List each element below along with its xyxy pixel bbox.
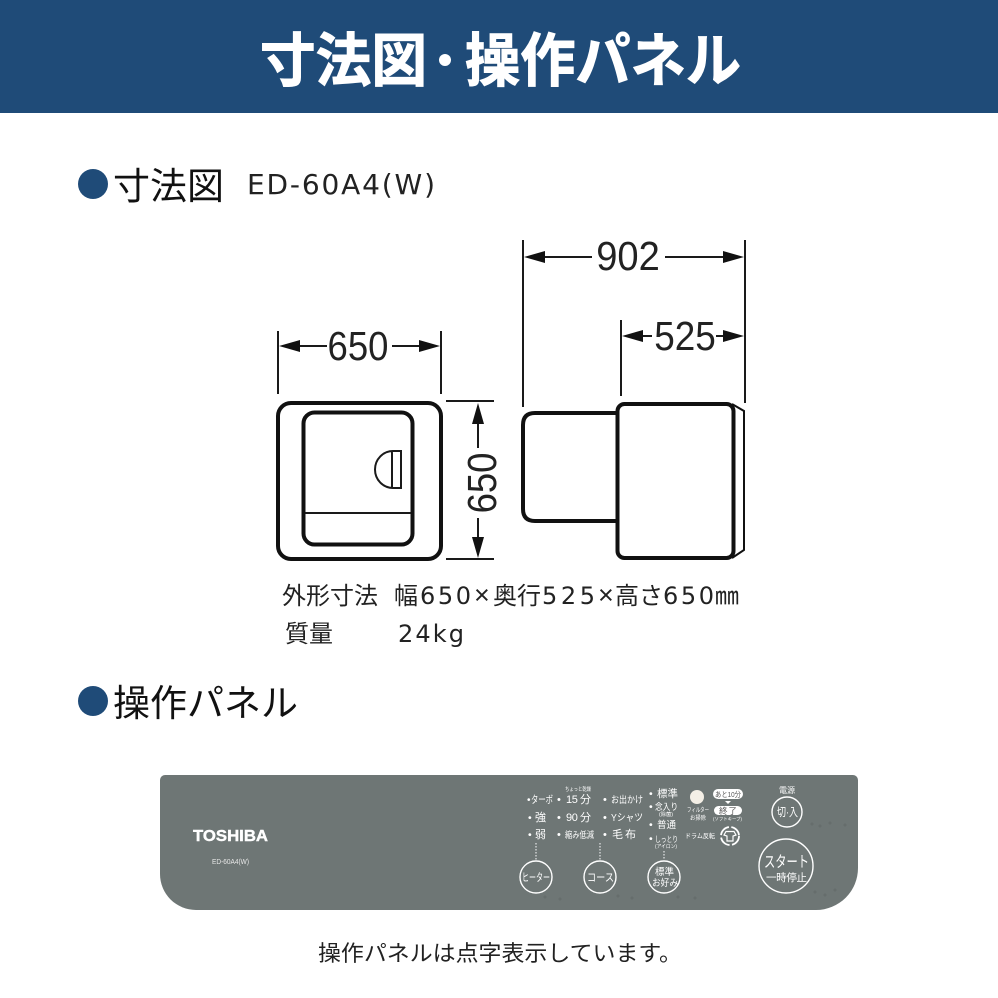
- title: 操作パネル: [465, 29, 741, 94]
- dimension: depth 525: [621, 314, 745, 396]
- course button: コース: [587, 872, 614, 884]
- filter lamp: お掃除: [690, 814, 706, 822]
- specification text: 奥行: [493, 583, 541, 610]
- course options: •: [557, 829, 561, 841]
- specification text: 質量: [285, 621, 333, 648]
- heater options: [527, 794, 553, 860]
- start button: [759, 839, 813, 893]
- dimension: depth 902: [523, 234, 745, 407]
- specification text: ㎜: [715, 583, 739, 610]
- specification text: 外形寸法: [282, 583, 378, 610]
- specification text: 24kg: [398, 620, 464, 648]
- mode options: 標準: [657, 787, 678, 800]
- course options: ちょっと乾燥: [565, 785, 591, 793]
- course options: •: [603, 794, 607, 806]
- mode options: (除菌): [659, 811, 673, 818]
- mode options: しっとり: [655, 835, 678, 844]
- specification text: 幅: [394, 583, 418, 610]
- mode options: 念入り: [655, 802, 678, 812]
- mode options: 普通: [657, 819, 676, 831]
- finish indicators: (ソフトキープ): [713, 816, 742, 822]
- course options: [557, 785, 643, 860]
- finish indicators: あと10分: [715, 790, 741, 799]
- course options: •: [557, 794, 561, 806]
- course button: [584, 861, 616, 893]
- title: [260, 29, 741, 94]
- heater button: ヒーター: [522, 871, 550, 884]
- dimension: height 650: [446, 401, 506, 559]
- course options: 毛 布: [612, 828, 636, 841]
- heading: dimension drawing: 寸法図: [113, 166, 224, 207]
- course options: 縮み低減: [565, 829, 594, 840]
- course options: 15 分: [566, 793, 591, 806]
- heater options: 弱: [535, 828, 546, 841]
- mode options: (アイロン): [655, 844, 677, 850]
- specification text: 525: [542, 582, 595, 610]
- dimension: depth 902: 902: [596, 234, 660, 279]
- heater options: •: [527, 795, 531, 806]
- start button: 一時停止: [766, 871, 807, 884]
- power button: 電源: [779, 786, 795, 795]
- mode options: •: [649, 788, 653, 800]
- heading: dimension drawing: ED-60A4(W): [247, 168, 435, 201]
- caption: 操作パネルは点字表示しています。: [318, 941, 682, 966]
- course options: 90 分: [566, 811, 591, 824]
- standard / favourite button: [648, 861, 680, 893]
- course options: •: [603, 829, 607, 841]
- filter lamp: [687, 790, 709, 822]
- heater button: [520, 861, 552, 893]
- specification text: 高さ: [615, 583, 663, 610]
- course options: Yシャツ: [611, 813, 643, 824]
- specification text: [282, 580, 739, 648]
- finish indicators: 終了: [719, 806, 737, 816]
- heater options: •: [528, 812, 532, 824]
- control panel: [160, 775, 858, 910]
- mode options: •: [649, 801, 653, 813]
- embossed braille marks: [544, 822, 846, 900]
- front view drawing: [278, 403, 441, 559]
- mode options: [649, 787, 678, 860]
- finish indicators: [713, 789, 743, 822]
- heater options: •: [528, 829, 532, 841]
- header band: [0, 0, 998, 113]
- heading: control panel: 操作パネル: [113, 683, 298, 724]
- dimension: depth 525: 525: [654, 314, 716, 359]
- specification text: 650: [420, 582, 471, 610]
- standard / favourite button: 標準: [655, 866, 674, 878]
- standard / favourite button: お好み: [652, 877, 678, 889]
- brand logo: TOSHIBA: [193, 828, 268, 845]
- specification text: ×: [474, 580, 490, 610]
- dimension: width 650: [278, 324, 441, 394]
- dimension: height 650: 650: [460, 453, 506, 513]
- heater options: 強: [535, 811, 546, 824]
- drum reversal indicator: ドラム反転: [685, 832, 715, 840]
- mode options: •: [649, 819, 653, 831]
- side view drawing: [523, 404, 744, 558]
- start button: スタート: [764, 853, 809, 871]
- heading: dimension drawing: [78, 166, 435, 207]
- power button: [772, 786, 802, 827]
- course options: •: [603, 812, 607, 824]
- specification text: ×: [598, 580, 614, 610]
- course options: •: [557, 812, 561, 824]
- specification text: 650: [663, 582, 714, 610]
- title: 寸法図: [260, 29, 427, 94]
- drum reversal indicator: [685, 827, 739, 845]
- filter lamp: フィルター: [687, 806, 709, 814]
- mode options: •: [649, 833, 653, 845]
- model label: ED-60A4(W): [212, 859, 249, 866]
- dimension: width 650: 650: [328, 324, 388, 370]
- heater options: ターボ: [531, 794, 553, 806]
- power button: 切·入: [777, 806, 798, 819]
- course options: お出かけ: [611, 794, 643, 806]
